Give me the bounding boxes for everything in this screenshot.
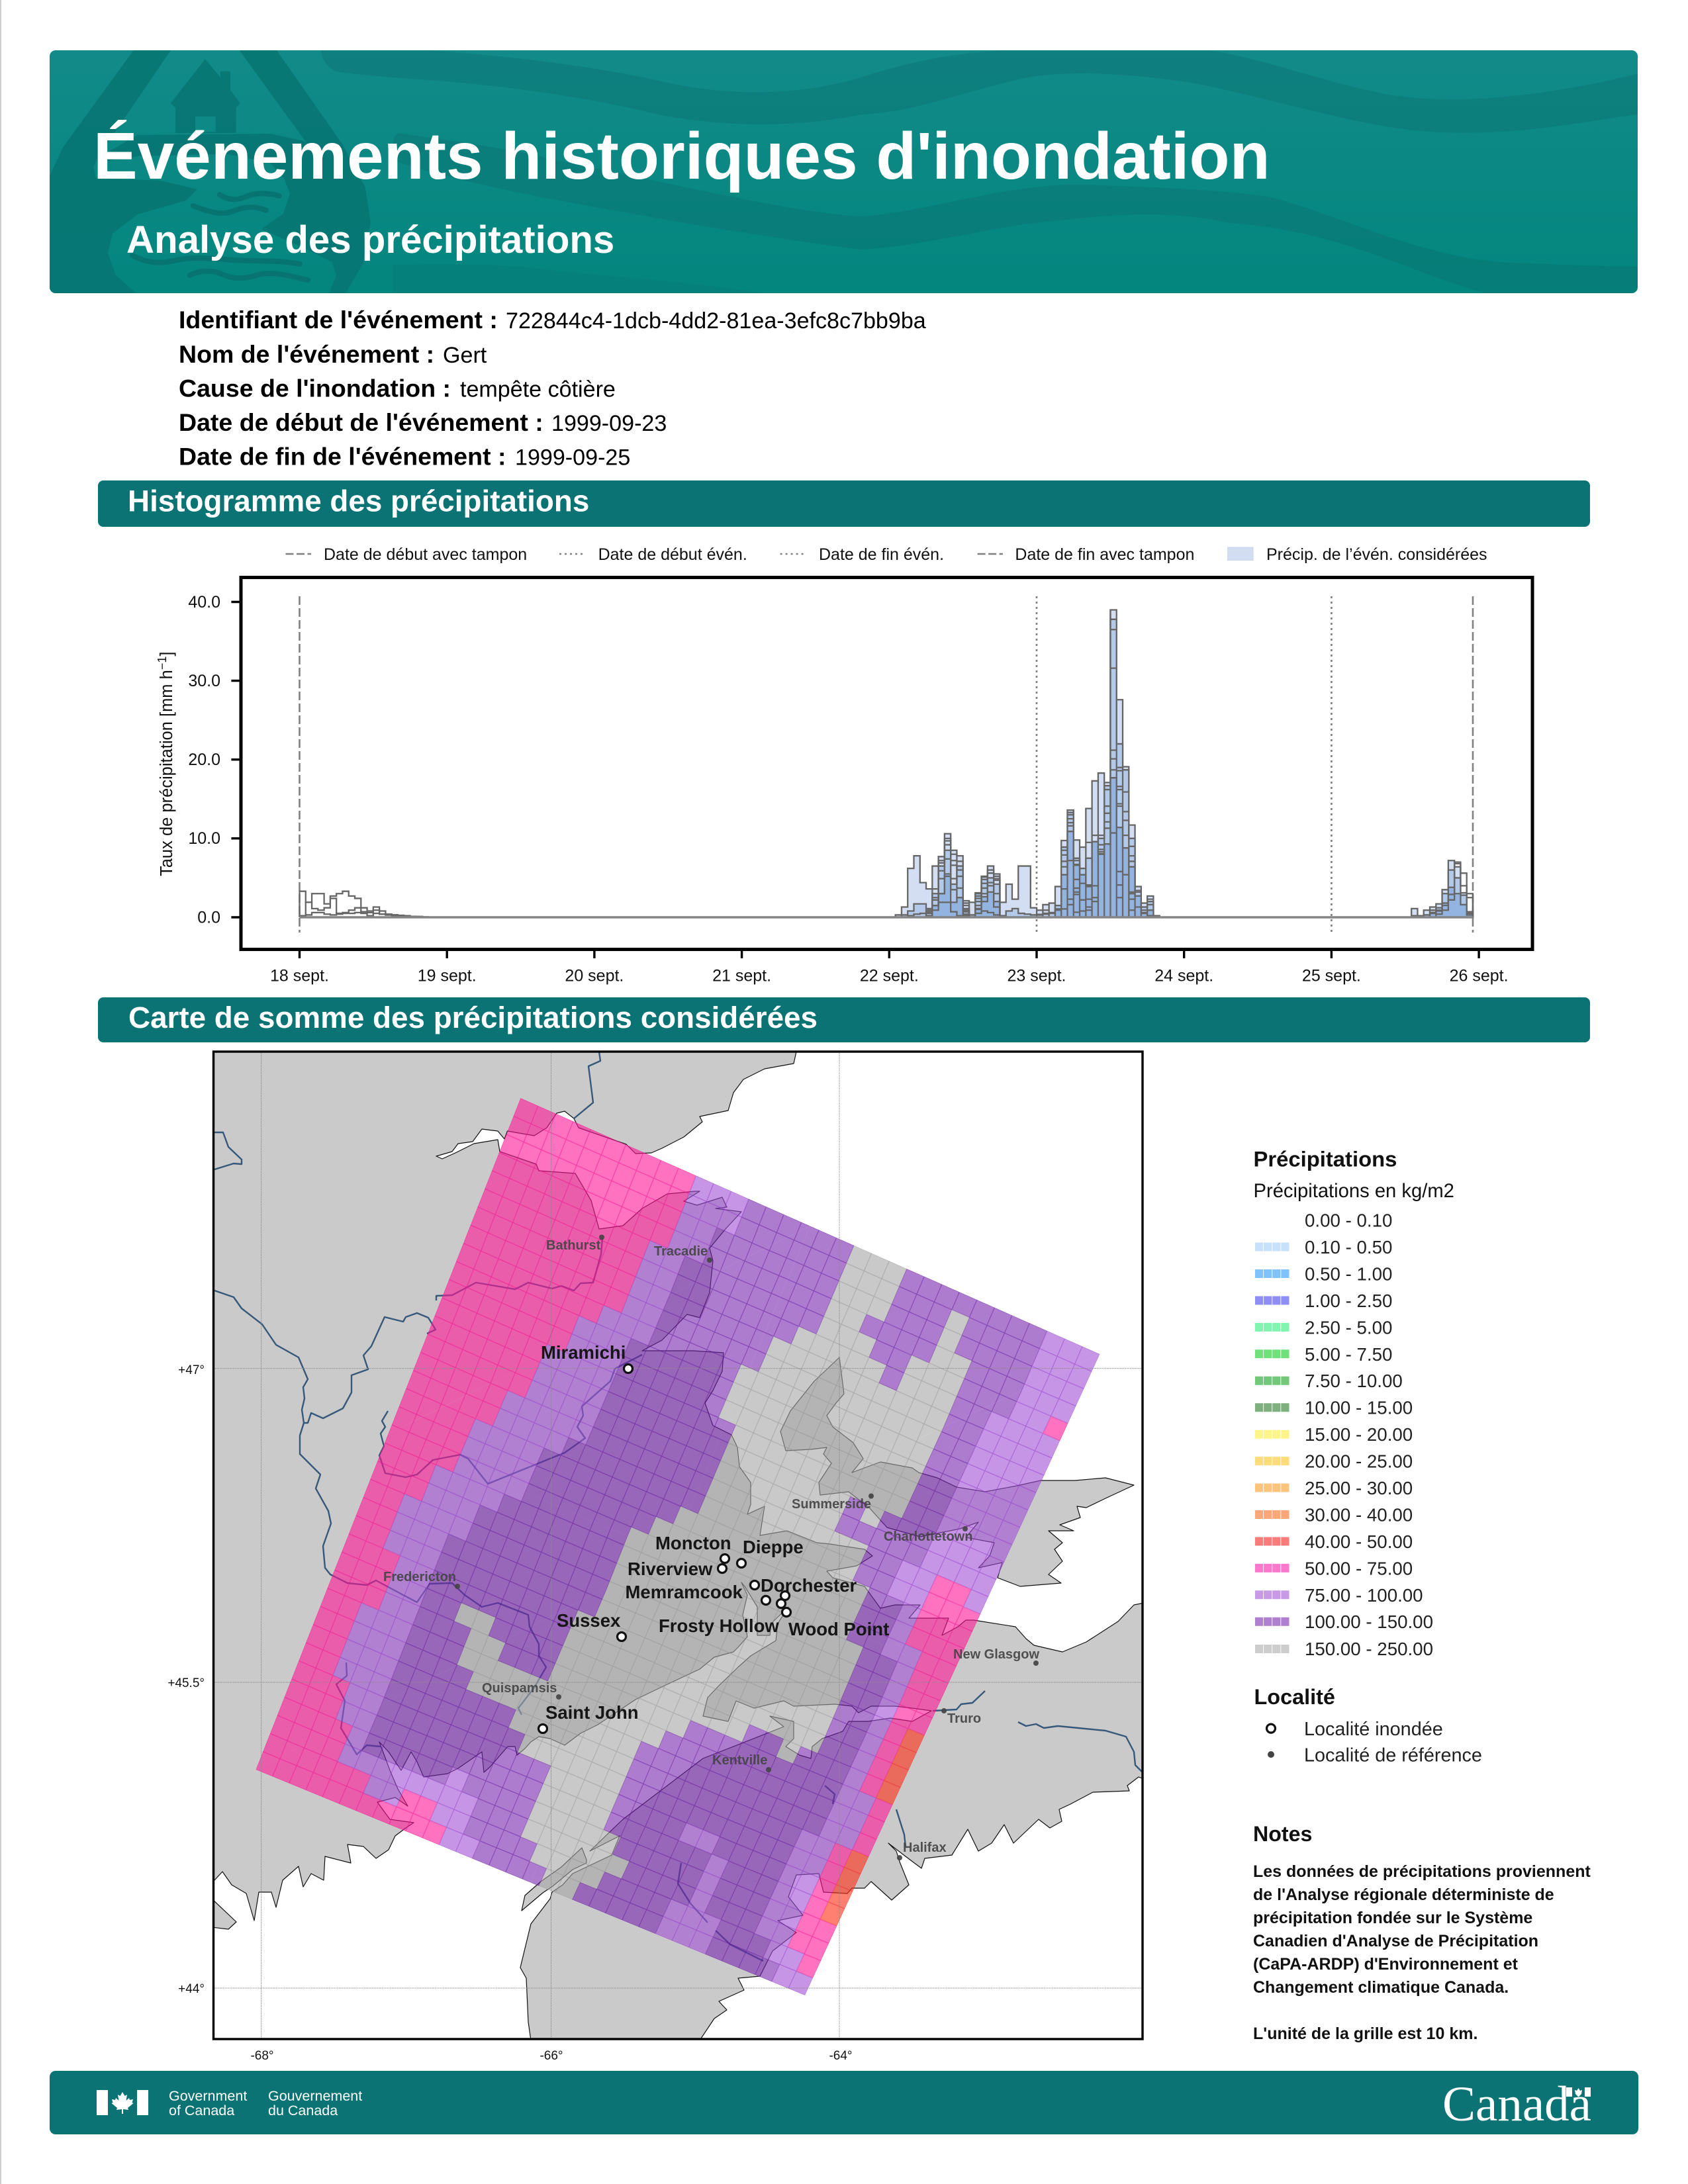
event name: Gert (443, 343, 487, 368)
flooded localities: Memramcook (625, 1582, 743, 1602)
section heading: histogram (98, 480, 1590, 527)
panel: histogram legend: Date de fin avec tampon (1015, 545, 1194, 564)
reference localities: Halifax (903, 1841, 947, 1855)
legend class labels: 75.00 - 100.00 (1305, 1585, 1423, 1606)
title: Événements historiques d'inondation (93, 120, 1270, 193)
legend class labels: 0.10 - 0.50 (1305, 1237, 1392, 1257)
basemap and overlay (212, 1052, 1144, 2040)
legend class labels: 10.00 - 15.00 (1305, 1398, 1413, 1418)
legend class labels: 2.50 - 5.00 (1305, 1317, 1392, 1338)
map axis labels: -66° (539, 2049, 563, 2063)
axis ticks and labels: 19 sept. (418, 966, 477, 985)
event date lines (299, 596, 1473, 933)
legend class labels: 0.50 - 1.00 (1305, 1264, 1392, 1284)
rivers (214, 1052, 1143, 1961)
section heading: map (98, 997, 1590, 1042)
reference localities: Fredericton (383, 1570, 456, 1584)
panel: locality legend: Localité de référence (1304, 1745, 1482, 1766)
reference localities: New Glasgow (953, 1647, 1039, 1662)
flood cause: tempête côtière (460, 377, 616, 402)
event information block (179, 306, 926, 470)
flooded localities: Miramichi (541, 1342, 626, 1363)
flood cause: Cause de l'inondation : (179, 375, 451, 402)
flooded localities: Sussex (557, 1610, 621, 1631)
legend class labels: 25.00 - 30.00 (1305, 1478, 1413, 1498)
legend class labels: 5.00 - 7.50 (1305, 1344, 1392, 1365)
flooded localities: Frosty Hollow (659, 1615, 779, 1636)
panel: locality legend: Localité (1254, 1685, 1335, 1709)
notes body: précipitation fondée sur le Système (1253, 1909, 1532, 1927)
bar chart: precipitation histogram (156, 577, 1532, 985)
footer band (50, 2071, 1638, 2134)
flooded localities: Moncton (655, 1533, 731, 1553)
axis ticks and labels: 40.0 (188, 593, 220, 612)
flooded localities: Wood Point (788, 1619, 889, 1639)
map axis labels: -68° (250, 2049, 274, 2063)
legend swatches (1255, 1247, 1289, 1649)
graticule (213, 1052, 1143, 2039)
axis ticks and labels: 25 sept. (1302, 966, 1361, 985)
panel: histogram legend: Date de début évén. (598, 545, 747, 564)
government name: of Canada (169, 2103, 234, 2118)
reference localities (383, 1235, 1039, 1860)
axis ticks and labels: 21 sept. (712, 966, 771, 985)
panel: locality legend: Localité inondée (1304, 1719, 1443, 1740)
panel: precipitation map (167, 1052, 1144, 2063)
legend class labels: 20.00 - 25.00 (1305, 1451, 1413, 1472)
event name: Nom de l'événement : (179, 340, 434, 368)
icon: Canadian flag signature (97, 2090, 148, 2115)
reference localities: Charlottetown (884, 1529, 972, 1544)
reference localities: Summerside (792, 1497, 871, 1512)
axis ticks and labels: 20 sept. (565, 966, 624, 985)
stepped precipitation series (299, 610, 1473, 917)
end date: 1999-09-25 (515, 445, 630, 470)
notes body: Canadien d'Analyse de Précipitation (1253, 1932, 1538, 1950)
legend class labels: 1.00 - 2.50 (1305, 1291, 1392, 1311)
legend class labels: 40.00 - 50.00 (1305, 1531, 1413, 1552)
start date: 1999-09-23 (551, 411, 667, 436)
government name: Gouvernement (268, 2088, 362, 2104)
government name: Government (169, 2088, 247, 2104)
axis ticks and labels: 24 sept. (1154, 966, 1213, 985)
reference localities: Kentville (712, 1753, 767, 1768)
legend title: Précipitations (1254, 1146, 1397, 1171)
page edge line (0, 0, 1, 2184)
panel: locality legend (1254, 1685, 1482, 1766)
legend subtitle: Précipitations en kg/m2 (1254, 1181, 1454, 1202)
decorative waves (321, 46, 1642, 298)
flooded localities: Riverview (628, 1559, 713, 1579)
map frame (213, 1052, 1143, 2039)
subtitle: Analyse des précipitations (126, 218, 614, 261)
legend class labels: 15.00 - 20.00 (1305, 1424, 1413, 1445)
flooded localities (539, 1342, 889, 1733)
axis ticks and labels: 0.0 (197, 908, 220, 927)
legend class labels: 50.00 - 75.00 (1305, 1558, 1413, 1578)
icon: flood logo watermark (50, 50, 371, 294)
panel: histogram legend (286, 545, 1487, 564)
event id: Identifiant de l'événement : (179, 306, 498, 334)
map axis labels: +44° (178, 1982, 205, 1996)
reference localities: Bathurst (546, 1238, 601, 1253)
panel: notes: Notes (1253, 1822, 1312, 1846)
legend class labels: 0.00 - 0.10 (1305, 1210, 1392, 1231)
section heading: map: Carte de somme des précipitations considérées (128, 1001, 818, 1034)
axis ticks and labels (188, 593, 1509, 985)
y axis title: Taux de précipitation [mm h (158, 670, 176, 876)
flooded localities: Dieppe (743, 1537, 804, 1557)
panel: notes (1253, 1822, 1591, 2043)
map axis labels (167, 1363, 853, 2063)
map axis labels: +47° (178, 1363, 205, 1377)
flooded localities: Saint John (545, 1702, 639, 1723)
notes body: (CaPA-ARDP) d'Environnement et (1253, 1955, 1519, 1974)
government name (169, 2088, 362, 2118)
end date: Date de fin de l'événement : (179, 442, 506, 470)
land masses (212, 1052, 1144, 2040)
panel: precipitation legend (1254, 1146, 1454, 1659)
panel: histogram legend: Date de début avec tampon (324, 545, 527, 564)
legend class labels (1305, 1210, 1433, 1659)
axis ticks and labels: 23 sept. (1008, 966, 1066, 985)
section heading: histogram: Histogramme des précipitations (128, 484, 589, 518)
legend class labels: 30.00 - 40.00 (1305, 1505, 1413, 1525)
legend class labels: 100.00 - 150.00 (1305, 1612, 1433, 1632)
header banner (50, 46, 1642, 298)
legend class labels: 7.50 - 10.00 (1305, 1371, 1403, 1391)
notes body: Changement climatique Canada. (1253, 1978, 1509, 1997)
notes body: de l'Analyse régionale déterministe de (1253, 1886, 1554, 1904)
panel: histogram legend: Date de fin évén. (819, 545, 944, 564)
reference localities: Truro (947, 1711, 981, 1726)
notes body: L'unité de la grille est 10 km. (1253, 2025, 1477, 2043)
map axis labels: +45.5° (167, 1676, 205, 1690)
y axis title: −1 (156, 657, 169, 670)
axis ticks and labels: 22 sept. (860, 966, 919, 985)
axis ticks and labels: 10.0 (188, 829, 220, 848)
map axis labels: -64° (829, 2049, 853, 2063)
axis ticks and labels: 30.0 (188, 672, 220, 690)
legend class labels: 150.00 - 250.00 (1305, 1639, 1433, 1659)
axis ticks and labels: 20.0 (188, 751, 220, 769)
Canada wordmark: Canada (1442, 2077, 1591, 2132)
start date: Date de début de l'événement : (179, 408, 543, 436)
event id: 722844c4-1dcb-4dd2-81ea-3efc8c7bb9ba (506, 308, 926, 334)
notes body (1253, 1862, 1591, 2043)
precipitation grid overlay (241, 1098, 1100, 2026)
chart frame (241, 577, 1532, 949)
axis ticks and labels: 18 sept. (270, 966, 329, 985)
reference localities: Tracadie (654, 1244, 708, 1259)
panel: histogram legend: Précip. de l’évén. considérées (1266, 545, 1487, 564)
axis ticks and labels: 26 sept. (1450, 966, 1509, 985)
government name: du Canada (268, 2103, 338, 2118)
notes body: Les données de précipitations proviennent (1253, 1862, 1591, 1881)
reference localities: Quispamsis (482, 1681, 557, 1696)
flooded localities: Dorchester (761, 1575, 857, 1596)
y axis title: ] (158, 652, 176, 657)
